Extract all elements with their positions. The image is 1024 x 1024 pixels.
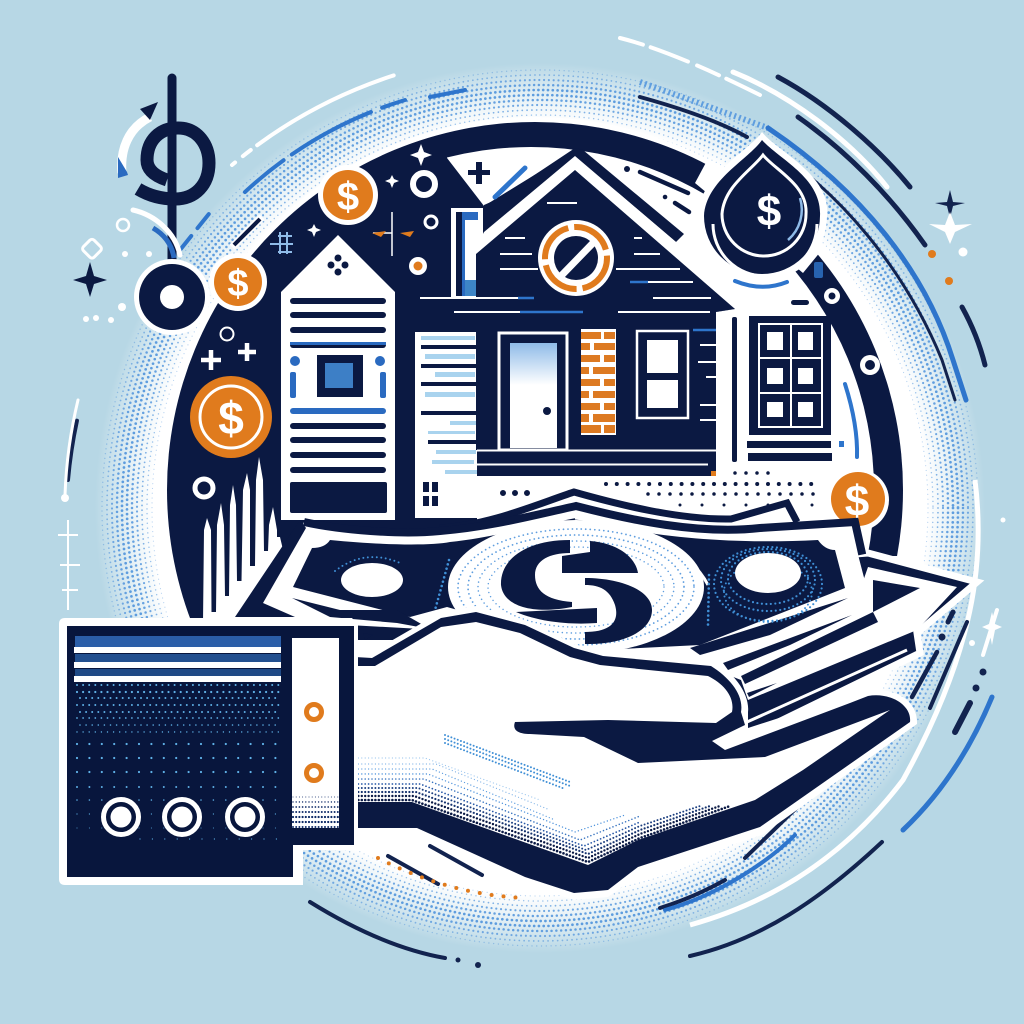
hand bbox=[350, 606, 917, 900]
halo: white dotted ring bbox=[95, 63, 985, 953]
tall building bbox=[281, 235, 395, 520]
center medallion bbox=[448, 520, 704, 654]
cuff dots bbox=[77, 685, 281, 839]
banknotes bbox=[235, 492, 977, 748]
roof highlight lines bbox=[420, 203, 716, 420]
main house bbox=[420, 148, 735, 475]
drop coin icon: $ bbox=[757, 187, 781, 236]
coin: large bbox=[190, 376, 272, 458]
back stack bbox=[700, 553, 977, 748]
cuff buttons bbox=[104, 800, 262, 834]
rear bill outline bbox=[440, 492, 797, 528]
sparkle left bbox=[73, 219, 152, 323]
navy disc with inner scene bbox=[167, 119, 903, 640]
coin: middle bbox=[209, 253, 267, 311]
small sparkles and rings on the navy disc bbox=[195, 144, 689, 622]
front bill paper bbox=[258, 506, 873, 665]
sparkles right bbox=[456, 190, 1006, 968]
white document panel bbox=[415, 332, 477, 518]
brick wall bbox=[581, 329, 616, 435]
shirt cuff bbox=[59, 618, 358, 885]
coin: right bbox=[827, 469, 889, 531]
small crosses lower left bbox=[58, 494, 80, 610]
coin: right: $ bbox=[845, 477, 869, 526]
medallion S symbol bbox=[501, 540, 652, 644]
cuff stripes bbox=[74, 636, 281, 682]
drop coin icon bbox=[697, 132, 827, 281]
bill left edge bbox=[235, 520, 306, 617]
ring bits on right bbox=[814, 262, 880, 457]
note edge stripes bbox=[690, 598, 878, 697]
side window bbox=[732, 300, 832, 462]
dotted palm shading bbox=[355, 735, 730, 862]
coin: large: $ bbox=[218, 392, 244, 444]
roof vent circle bbox=[538, 220, 614, 296]
coin: middle: $ bbox=[227, 263, 249, 305]
dotted ground rows bbox=[503, 473, 815, 505]
front window bbox=[637, 331, 688, 418]
cuff placket bbox=[292, 638, 339, 828]
currency symbol top left bbox=[118, 78, 209, 265]
door bbox=[499, 333, 567, 450]
coin: top bbox=[318, 165, 378, 225]
bill holes bbox=[341, 563, 403, 597]
blue arc below drop bbox=[735, 281, 787, 287]
coin: top: $ bbox=[337, 175, 359, 219]
target circle left bbox=[134, 259, 210, 335]
inner bill bbox=[293, 518, 845, 650]
chimney bbox=[451, 208, 483, 298]
